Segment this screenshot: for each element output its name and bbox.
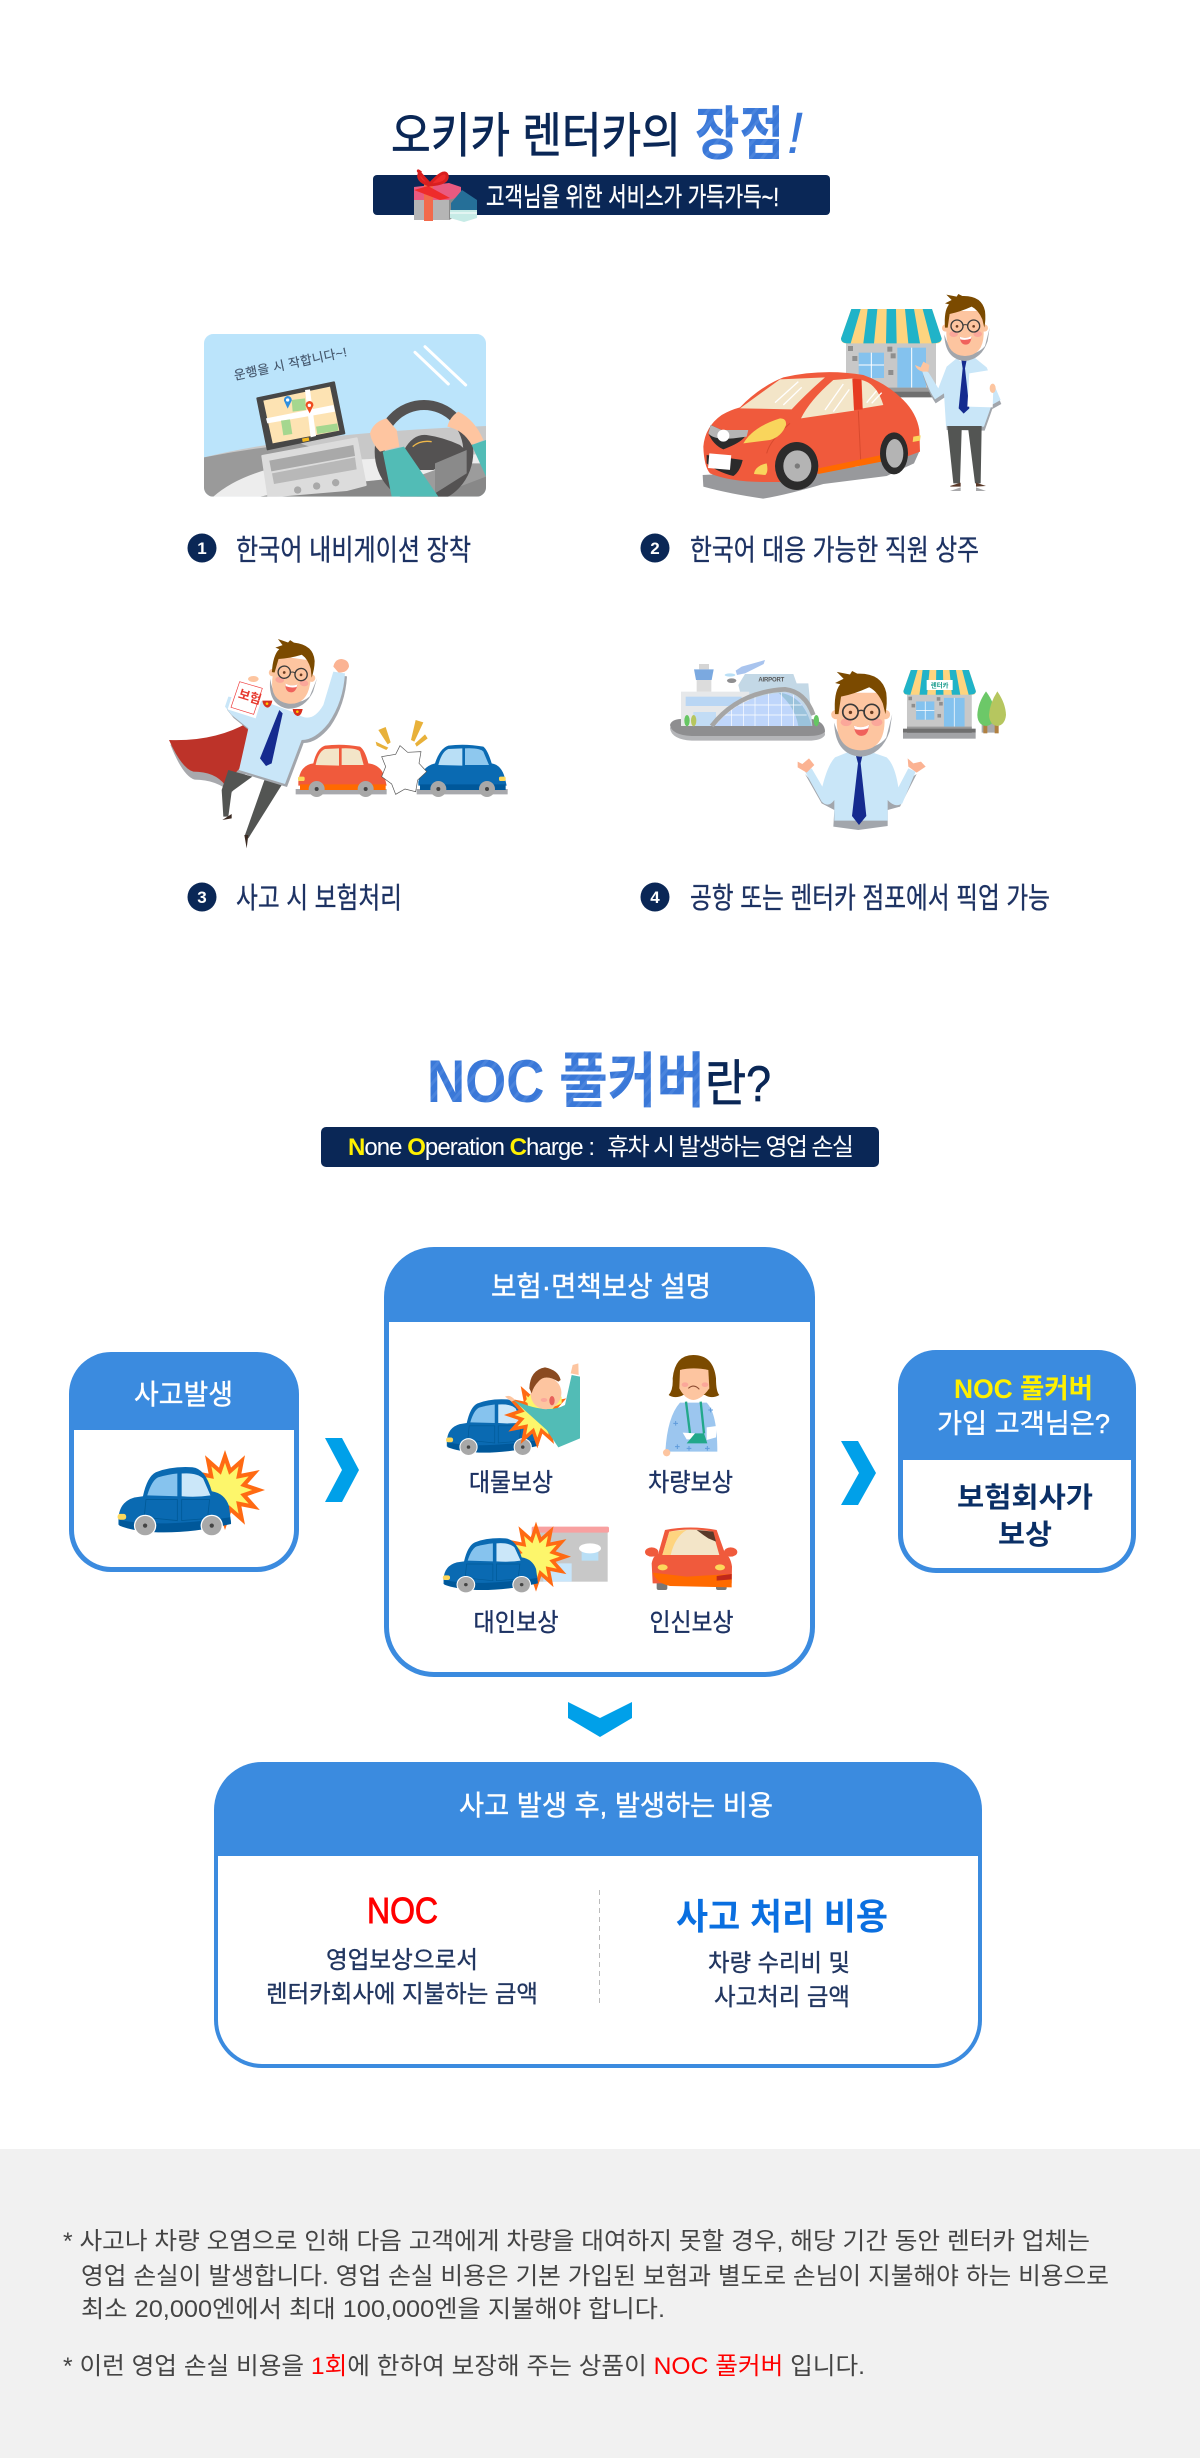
- note 1: 영업 손실이 발생합니다. 영업 손실 비용은 기본 가입된 보험과 별도로 손님이 지불해야 하는 비용으로: [81, 2263, 1109, 2290]
- panel: costs after accident: [214, 1762, 982, 2068]
- icons: compensation types: [443, 1355, 737, 1593]
- arrow: accident to coverage: [325, 1438, 359, 1502]
- icon: shop: [841, 309, 942, 397]
- subtitle banner: 고객님을 위한 서비스가 가득가득~!: [486, 182, 779, 212]
- illustration: airport, staff, shop and trees: [670, 660, 1006, 830]
- column: NOC: 영업보상으로서: [326, 1947, 478, 1974]
- label 4: 공항 또는 렌터카 점포에서 픽업 가능: [690, 882, 1050, 915]
- subtitle banner: NOC definition: [321, 1127, 879, 1167]
- icon: superhero staff: 보험: [237, 686, 263, 707]
- icon: building collision: [443, 1522, 609, 1593]
- header: advantages title: 오키카 렌터카의: [391, 110, 681, 163]
- label: property: 대물보상: [469, 1469, 553, 1497]
- icon: superhero staff: [169, 638, 349, 848]
- illustration: dashboard with navigation: [204, 334, 486, 498]
- illustration: car, shop and staff: [703, 294, 1001, 499]
- label: bodily injury: 대인보상: [474, 1609, 558, 1637]
- panel heading: 보험·면책보상 설명: [491, 1271, 711, 1302]
- header: advantages title: !: [787, 101, 803, 166]
- icon: staff: [798, 671, 926, 830]
- subtitle banner: [373, 171, 830, 222]
- number badge 4: 4: [650, 888, 660, 907]
- icon: blue car: [417, 745, 508, 797]
- header: advantages title: [391, 101, 803, 167]
- panel: footnotes: [0, 2149, 1200, 2458]
- panel: advantage 3 insurance: [169, 638, 508, 915]
- icon: front damaged car: [645, 1527, 737, 1590]
- icon: crash burst: [376, 720, 428, 794]
- subtitle banner: NOC definition: 휴차 시 발생하는 영업 손실: [607, 1134, 854, 1161]
- number badge 2: 2: [650, 539, 660, 558]
- column: accident handling cost: [676, 1896, 888, 2011]
- panel: accident occurs: [69, 1352, 299, 1572]
- panel: advantage 4 pickup: [640, 660, 1050, 915]
- icon: rental shop: [903, 670, 976, 739]
- panel: insurance and compensation: [384, 1247, 815, 1677]
- illustration: superhero staff and collision: [169, 638, 508, 848]
- icon: red car: [296, 745, 387, 797]
- column: NOC: 렌터카회사에 지불하는 금액: [266, 1981, 538, 2008]
- panel heading: 사고 발생 후, 발생하는 비용: [459, 1790, 773, 1821]
- icon: steering wheel and hands: [370, 405, 486, 498]
- number badge 1: [188, 534, 216, 562]
- column: accident handling cost: 사고 처리 비용: [676, 1896, 888, 1937]
- subtitle banner: NOC definition: None Operation Charge :: [348, 1134, 595, 1161]
- heading: NOC full cover: NOC 풀커버: [427, 1048, 705, 1115]
- panel: NOC full cover customers: [898, 1350, 1136, 1573]
- icon: trees: [977, 691, 1006, 733]
- label 1: 한국어 내비게이션 장착: [236, 534, 471, 567]
- icon: injured woman: [663, 1355, 719, 1456]
- note 2: * 이런 영업 손실 비용을 1회에 한하여 보장해 주는 상품이 NOC 풀커버 입니다.: [63, 2353, 865, 2380]
- icon: gift boxes: [414, 171, 477, 222]
- column: NOC: [266, 1890, 538, 2008]
- header: advantages title: 장점: [695, 102, 784, 167]
- number badge 1: 1: [197, 539, 207, 558]
- note 1: * 사고나 차량 오염으로 인해 다음 고객에게 차량을 대여하지 못할 경우, 해당 기간 동안 렌터카 업체는: [63, 2228, 1090, 2255]
- note 1: 최소 20,000엔에서 최대 100,000엔을 지불해야 합니다.: [81, 2296, 665, 2323]
- handwritten note: 운행을 시 작합니다~!: [233, 344, 348, 383]
- number badge 2: [640, 534, 670, 562]
- label: personal injury: 인신보상: [650, 1609, 734, 1637]
- icon: radio console: [262, 438, 366, 497]
- label: vehicle: 차량보상: [648, 1469, 733, 1497]
- icon: property damage: [446, 1363, 580, 1456]
- icon: airport: AIRPORT: [758, 678, 785, 684]
- heading: NOC full cover: 란?: [705, 1056, 771, 1112]
- icon: tablet map: [257, 382, 344, 449]
- number badge 4: [640, 882, 670, 912]
- panel heading: 사고발생: [134, 1379, 233, 1410]
- heading line 1: NOC 풀커버: [954, 1374, 1093, 1404]
- body line 1: 보험회사가: [957, 1482, 1093, 1513]
- icon: rental shop: 렌터카: [931, 680, 949, 689]
- note 1: [63, 2228, 1109, 2323]
- column: NOC: NOC: [367, 1890, 438, 1931]
- icon: car crash: [118, 1450, 265, 1537]
- panel: advantage 2 staff: [640, 294, 1001, 567]
- column: accident handling cost: 사고처리 금액: [714, 1984, 850, 2011]
- arrow: down: [568, 1702, 632, 1737]
- icon: airport: [670, 660, 825, 741]
- icon: red car: [703, 372, 921, 499]
- label 3: 사고 시 보험처리: [236, 883, 402, 915]
- body line 2: 보상: [998, 1519, 1052, 1550]
- icon: staff with document: [915, 294, 1001, 491]
- column: accident handling cost: 차량 수리비 및: [708, 1950, 850, 1977]
- panel: advantage 1 navigation: [188, 334, 486, 567]
- heading line 2: 가입 고객님은?: [937, 1409, 1110, 1439]
- number badge 3: [188, 882, 216, 912]
- label 2: 한국어 대응 가능한 직원 상주: [690, 534, 979, 567]
- number badge 3: 3: [197, 888, 207, 907]
- arrow: coverage to NOC cover: [841, 1441, 876, 1505]
